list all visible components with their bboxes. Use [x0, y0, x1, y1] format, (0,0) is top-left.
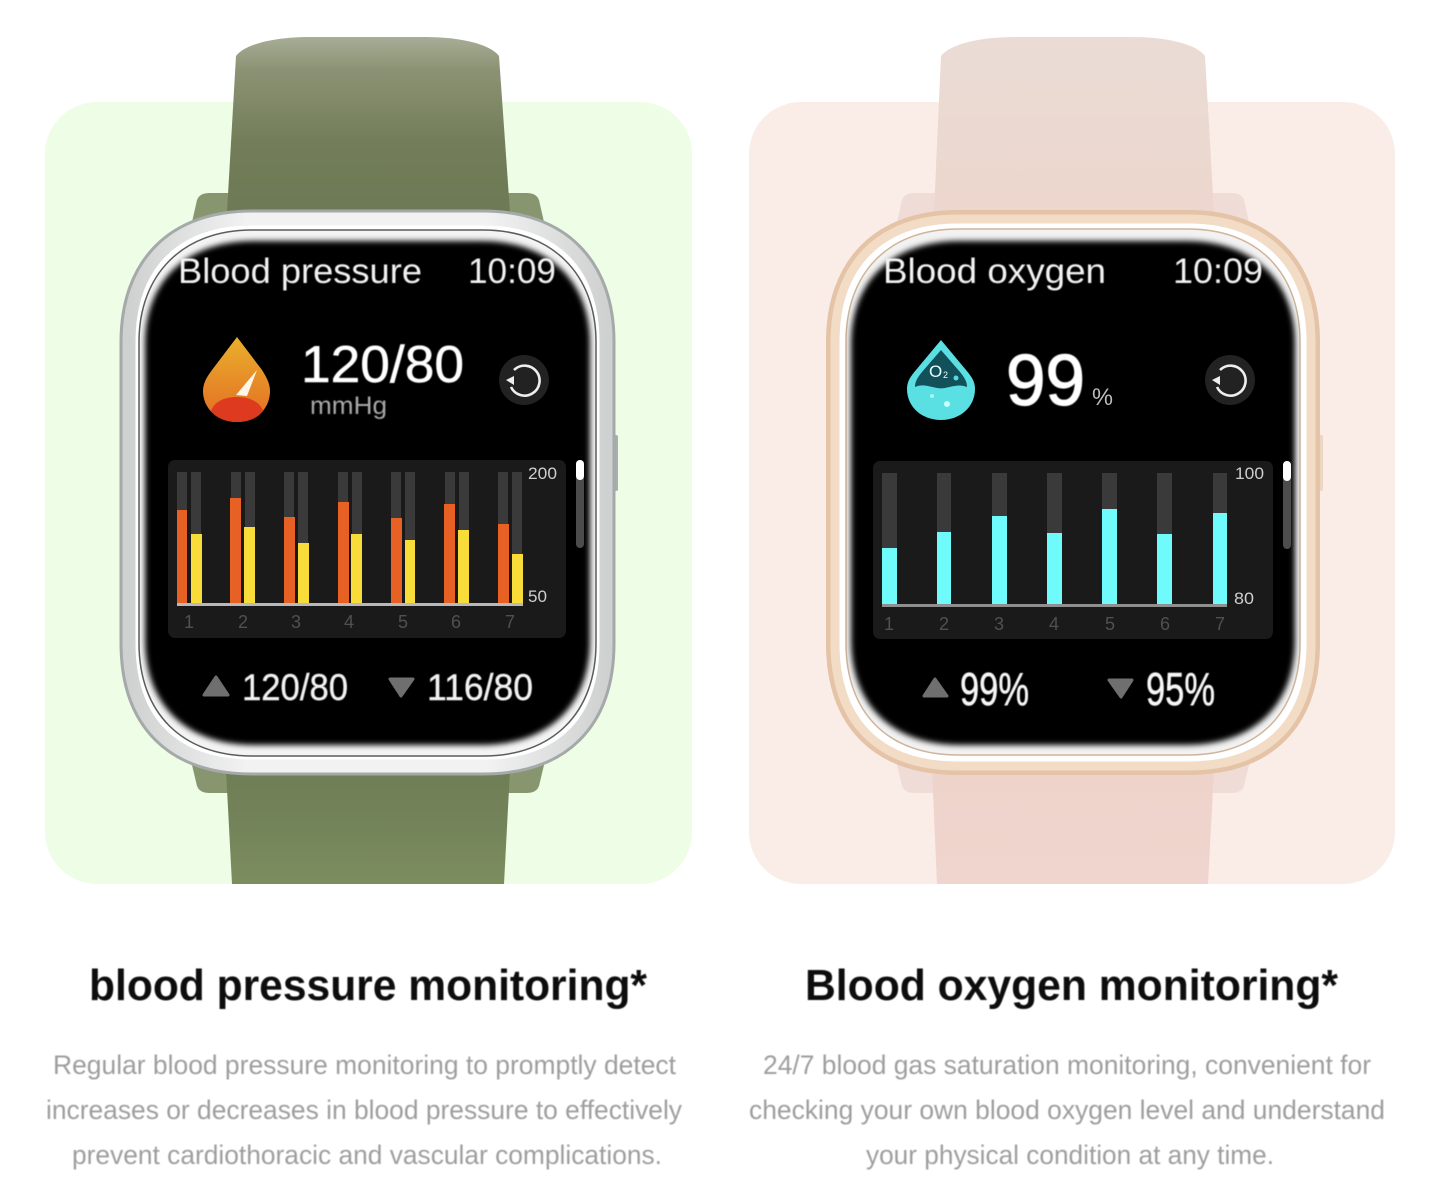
side button: [612, 435, 618, 491]
strap top: [227, 37, 510, 212]
watch: blood pressure: [129, 37, 618, 884]
bar chart: blood oxygen: 1: [884, 614, 894, 634]
bar chart: blood pressure: 6: [451, 612, 461, 632]
watch case: [129, 219, 606, 766]
text block: blood pressure description: increases or decreases in blood pressure to effectively: [46, 1095, 683, 1125]
watch screen: [145, 241, 590, 745]
bar chart: blood oxygen: 2: [939, 614, 949, 634]
screen time: 10:09: [1173, 252, 1263, 291]
strap lugs: [192, 193, 544, 793]
highest reading: 99%: [960, 663, 1029, 715]
bar chart: blood oxygen: 5: [1105, 614, 1115, 634]
screen title: Blood pressure: [178, 252, 422, 291]
bar chart: blood oxygen: 7: [1215, 614, 1225, 634]
bar chart: blood pressure: [168, 460, 566, 638]
icon: refresh button: [499, 355, 549, 405]
watch screen: [851, 241, 1295, 745]
side button: [1317, 435, 1323, 491]
bar chart: blood pressure: 5: [398, 612, 408, 632]
text block: blood oxygen description: checking your own blood oxygen level and understand: [749, 1095, 1385, 1125]
bar chart: blood pressure: 1: [184, 612, 194, 632]
scrollbar: [576, 460, 584, 548]
bar chart: blood oxygen: 3: [994, 614, 1004, 634]
icon: low arrow: [390, 679, 413, 696]
watch case: [835, 219, 1311, 766]
text block: blood oxygen description: your physical condition at any time.: [866, 1140, 1274, 1170]
blood oxygen reading: 99: [1006, 341, 1085, 421]
strap bottom: [932, 770, 1214, 884]
icon: high arrow: [924, 679, 947, 696]
percent unit: %: [1092, 384, 1113, 411]
icon: refresh button: [1205, 355, 1255, 405]
text block: blood oxygen description: [749, 1050, 1385, 1170]
bar chart: blood pressure: 2: [238, 612, 248, 632]
screen time: 10:09: [468, 252, 556, 291]
highest reading: 120/80: [242, 667, 348, 708]
bar chart: blood oxygen: 6: [1160, 614, 1170, 634]
panel: pink background: [749, 102, 1395, 884]
lowest reading: 95%: [1146, 663, 1215, 715]
heading: blood oxygen: Blood oxygen monitoring*: [805, 961, 1339, 1010]
icon: oxygen drop: [907, 340, 975, 420]
panel: green background: [45, 102, 692, 884]
text block: blood oxygen description: 24/7 blood gas saturation monitoring, convenient for: [763, 1050, 1371, 1080]
lowest reading: 116/80: [427, 667, 533, 708]
text block: blood pressure description: prevent cardiothoracic and vascular complications.: [72, 1140, 662, 1170]
strap top: [934, 37, 1214, 212]
bar chart: blood pressure: 200: [528, 464, 557, 483]
text block: blood pressure description: Regular blood pressure monitoring to promptly detect: [53, 1050, 677, 1080]
bar chart: blood pressure: 7: [505, 612, 515, 632]
unit: mmHg: [310, 392, 387, 420]
strap lugs: [897, 193, 1249, 793]
strap bottom: [226, 770, 510, 884]
bar chart: blood oxygen: [873, 461, 1273, 639]
bar chart: blood pressure: 3: [291, 612, 301, 632]
bar chart: blood oxygen: 100: [1235, 464, 1264, 483]
icon: pressure drop: [203, 337, 270, 422]
heading: blood pressure: blood pressure monitoring*: [89, 961, 648, 1010]
bar chart: blood pressure: 50: [528, 587, 547, 606]
screen title: Blood oxygen: [883, 252, 1106, 291]
icon: oxygen drop: O: [929, 362, 942, 381]
blood pressure reading: 120/80: [301, 336, 464, 394]
icon: high arrow: [204, 677, 228, 695]
bar chart: blood pressure: 4: [344, 612, 354, 632]
text block: blood pressure description: [46, 1050, 683, 1170]
scrollbar: [1283, 461, 1291, 549]
watch: blood oxygen: [835, 37, 1323, 884]
icon: low arrow: [1109, 680, 1132, 697]
icon: oxygen drop: 2: [943, 370, 948, 380]
bar chart: blood oxygen: 4: [1049, 614, 1059, 634]
bar chart: blood oxygen: 80: [1234, 589, 1254, 608]
